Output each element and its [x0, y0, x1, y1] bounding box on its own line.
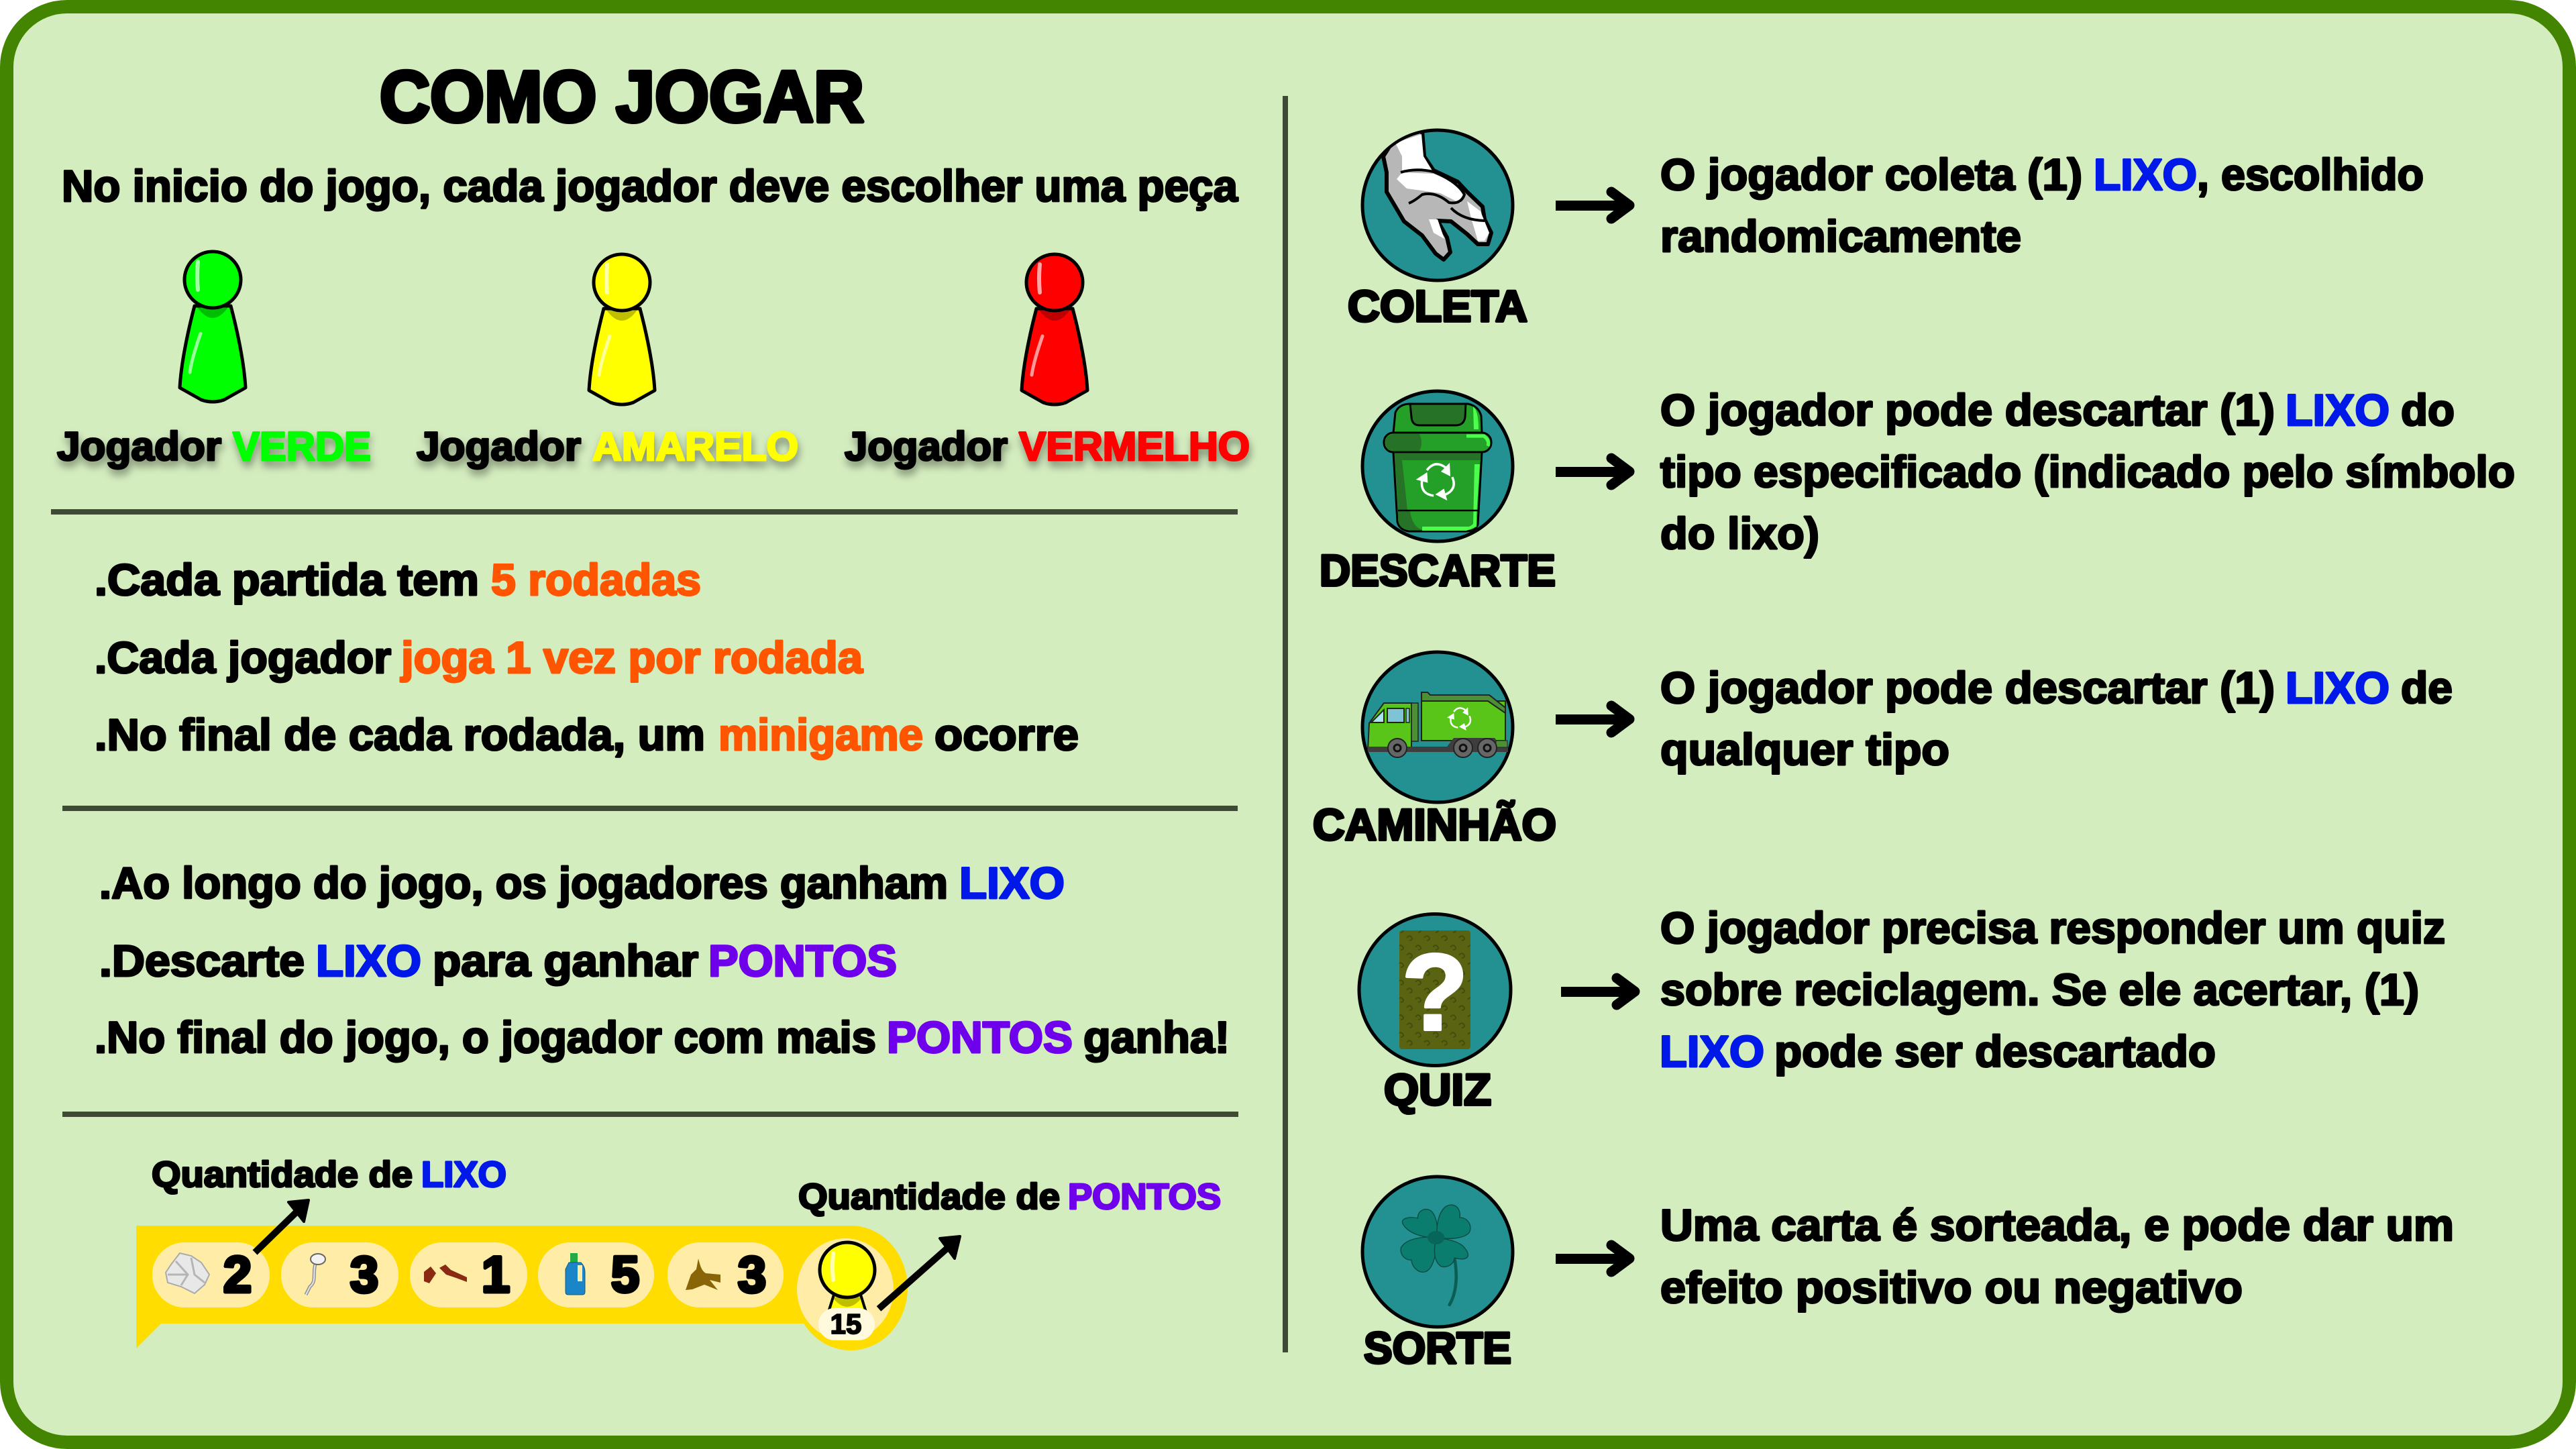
intro text: No inicio do jogo, cada jogador deve escolher uma peça: [62, 161, 1238, 211]
icon: red pawn: [1022, 254, 1087, 405]
icon: green recycling bin: [1362, 391, 1513, 541]
description: [1660, 385, 2515, 558]
description: [1660, 150, 2424, 261]
text block: scoring rules: .No final do jogo, o jogador com mais: [95, 1012, 876, 1062]
arrow: [1556, 1245, 1629, 1272]
description: tipo especificado (indicado pelo símbolo: [1660, 447, 2515, 496]
title: COMO JOGAR: [380, 56, 864, 137]
row: coleta: [1348, 130, 2424, 331]
text block: scoring rules: para ganhar: [433, 936, 698, 985]
row: caminhao: [1313, 652, 2453, 849]
text block: scoring rules: ganha!: [1083, 1012, 1230, 1062]
pill: banana count: [667, 1242, 784, 1307]
icon: yellow pawn: [589, 254, 655, 405]
description: LIXO: [2286, 663, 2390, 712]
row: descarte: [1320, 385, 2515, 595]
description: LIXO: [1660, 1026, 1764, 1076]
heading: quiz: QUIZ: [1384, 1065, 1491, 1114]
text block: scoring rules: [95, 858, 1230, 1062]
label: amount of points: PONTOS: [1068, 1177, 1221, 1217]
text block: scoring rules: .Ao longo do jogo, os jogadores ganham: [99, 858, 948, 908]
description: [1660, 1200, 2454, 1312]
description: qualquer tipo: [1660, 724, 1949, 774]
label: player red: VERMELHO: [1019, 424, 1250, 469]
text block: match rules: minigame: [718, 710, 923, 759]
icon: quiz card: [1359, 914, 1511, 1065]
label: player green: [57, 424, 371, 469]
description: O jogador precisa responder um quiz: [1660, 903, 2445, 953]
heading: caminhao: CAMINHÃO: [1313, 800, 1556, 849]
description: O jogador pode descartar (1): [1660, 385, 2275, 435]
points badge with pawn: [797, 1238, 894, 1340]
icon: hand collecting: [1362, 130, 1513, 280]
text block: scoring rules: PONTOS: [887, 1012, 1073, 1062]
text block: scoring rules: PONTOS: [708, 936, 897, 985]
label: player yellow: Jogador: [417, 424, 581, 469]
text block: scoring rules: LIXO: [316, 936, 421, 985]
description: Uma carta é sorteada, e pode dar um: [1660, 1200, 2454, 1250]
icon: green pawn: [180, 252, 246, 402]
text block: match rules: .No final de cada rodada, um: [95, 710, 705, 759]
panel: right column board spaces: [1313, 130, 2515, 1373]
pill: bottle count: [538, 1242, 654, 1307]
text block: match rules: .Cada jogador: [95, 633, 391, 682]
pill: nail count: 3: [350, 1246, 378, 1303]
pill: nail count: [281, 1242, 398, 1307]
description: sobre reciclagem. Se ele acertar, (1): [1660, 965, 2419, 1014]
row: quiz: [1359, 903, 2445, 1114]
text block: scoring rules: LIXO: [959, 858, 1065, 908]
label: amount of points: [798, 1177, 1221, 1217]
label: amount of trash: LIXO: [421, 1155, 506, 1195]
description: O jogador pode descartar (1): [1660, 663, 2275, 712]
heading: coleta: COLETA: [1348, 281, 1527, 331]
row: sorte: [1362, 1177, 2454, 1373]
pill: paper count: 2: [223, 1246, 252, 1303]
text block: match rules: .Cada partida tem: [95, 555, 479, 604]
icon: four leaf clover: [1362, 1177, 1513, 1327]
icon: quiz card: ?: [1402, 932, 1468, 1053]
text block: match rules: 5 rodadas: [491, 555, 701, 604]
pill: broken glass count: [410, 1242, 527, 1307]
description: , escolhido: [2197, 150, 2424, 199]
description: O jogador coleta (1): [1660, 150, 2082, 199]
label: player green: Jogador: [57, 424, 221, 469]
label: player yellow: AMARELO: [592, 424, 798, 469]
label: player red: Jogador: [845, 424, 1008, 469]
player status bar: [136, 1226, 908, 1350]
label: player yellow: [417, 424, 798, 469]
description: LIXO: [2094, 150, 2197, 199]
pill: paper count: [152, 1242, 270, 1307]
description: pode ser descartado: [1774, 1026, 2216, 1076]
heading: descarte: DESCARTE: [1320, 545, 1556, 595]
points badge with pawn: 15: [830, 1308, 861, 1340]
text block: match rules: [95, 555, 1079, 759]
description: randomicamente: [1660, 211, 2021, 261]
description: de: [2401, 663, 2453, 712]
arrow: [1556, 458, 1629, 485]
label: player red: [845, 424, 1250, 469]
label: player green: VERDE: [233, 424, 371, 469]
pill: broken glass count: 1: [482, 1246, 510, 1303]
description: LIXO: [2286, 385, 2390, 435]
bar background: [136, 1226, 850, 1348]
description: efeito positivo ou negativo: [1660, 1263, 2243, 1312]
arrow: [1556, 192, 1629, 219]
text block: match rules: ocorre: [934, 710, 1079, 759]
pill: banana count: 3: [738, 1246, 766, 1303]
pill: bottle count: 5: [611, 1246, 639, 1303]
description: [1660, 663, 2453, 774]
description: do lixo): [1660, 508, 1819, 558]
icon: garbage truck: [1362, 652, 1513, 802]
label: amount of trash: Quantidade de: [152, 1155, 413, 1195]
heading: sorte: SORTE: [1364, 1323, 1511, 1373]
text block: match rules: joga 1 vez por rodada: [400, 633, 863, 682]
arrow: [1561, 978, 1635, 1005]
description: [1660, 903, 2445, 1076]
arrow: to points amount: [879, 1236, 960, 1309]
description: do: [2401, 385, 2455, 435]
panel: left column how to play: [51, 56, 1250, 1350]
text block: scoring rules: .Descarte: [99, 936, 305, 985]
arrow: to trash amount: [255, 1200, 309, 1252]
label: amount of points: Quantidade de: [798, 1177, 1060, 1217]
arrow: [1556, 706, 1629, 733]
